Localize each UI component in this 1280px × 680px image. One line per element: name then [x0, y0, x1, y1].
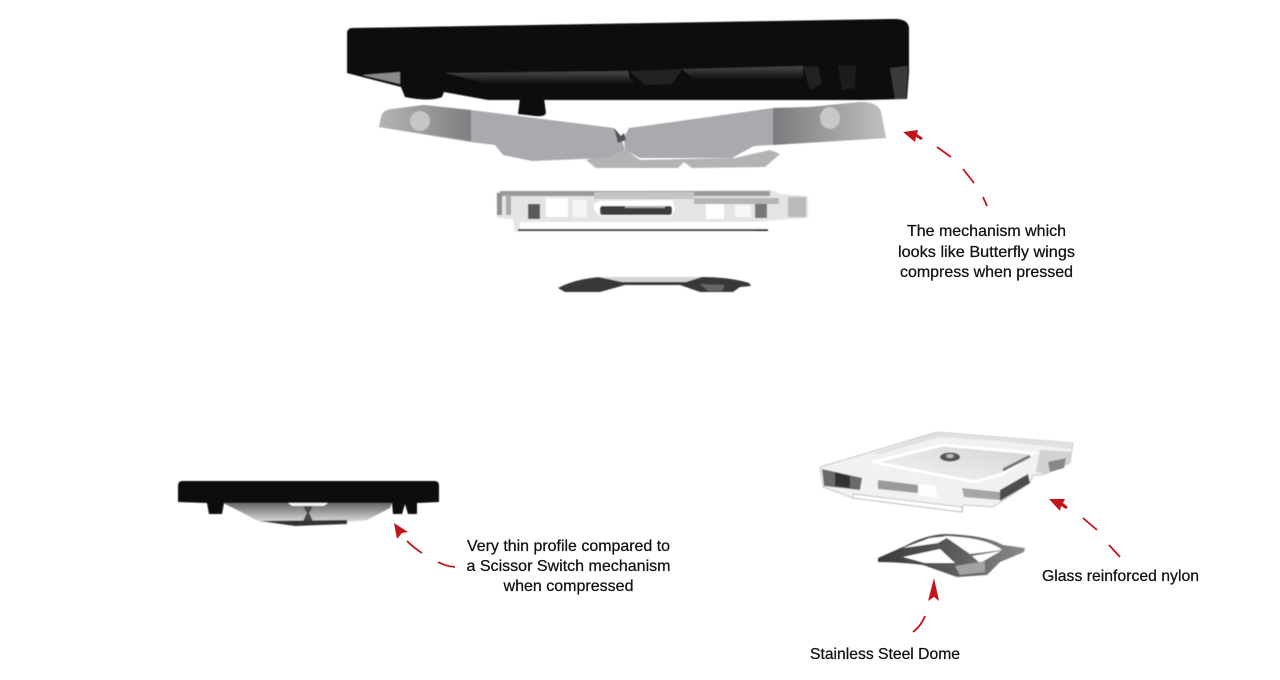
text: butterfly wings description: The mechanism which [907, 223, 1066, 240]
right wing [624, 102, 886, 158]
arrow: to nylon housing [1049, 499, 1120, 557]
glass reinforced nylon housing exploded side [496, 190, 808, 232]
text: stainless steel dome label: Stainless Steel Dome [810, 646, 960, 663]
arrow: to butterfly wings [903, 130, 987, 206]
lower wing layer [586, 150, 780, 168]
arrow: to thin profile [394, 523, 455, 567]
text: butterfly wings description [898, 223, 1075, 281]
butterfly wings [379, 102, 886, 168]
keycap compressed assembly [178, 481, 439, 526]
left wing [379, 105, 625, 161]
text: thin profile description: when compressed [502, 578, 634, 595]
arrow: to steel dome [913, 578, 939, 632]
text: thin profile description: Very thin profile compared to [467, 538, 670, 555]
text: thin profile description: a Scissor Switch mechanism [466, 558, 670, 575]
text: butterfly wings description: looks like Butterfly wings [898, 244, 1075, 261]
keycap exploded [347, 19, 909, 116]
glass reinforced nylon housing perspective [820, 432, 1073, 512]
text: butterfly wings description: compress when pressed [900, 264, 1073, 281]
text: thin profile description [466, 538, 670, 595]
text: glass reinforced nylon label: Glass reinforced nylon [1042, 568, 1199, 585]
stainless steel dome side [558, 277, 751, 292]
stainless steel dome perspective [878, 534, 1025, 577]
